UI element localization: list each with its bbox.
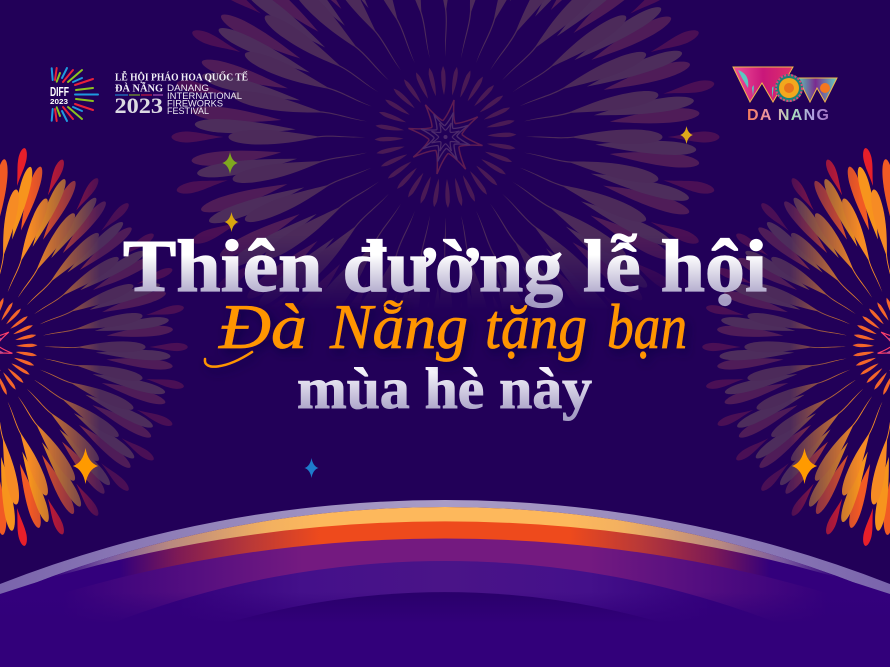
center firework burst [172,0,720,296]
first W [733,67,793,102]
right firework burst [702,148,890,546]
O medallion [775,74,803,102]
festival English name: FESTIVAL [167,106,209,116]
icon: orange sparkle left [73,448,98,484]
orange sun [820,83,830,93]
festival English name: DANANG [167,83,209,93]
festival Vietnamese name: LỄ HỘI PHÁO HOA QUỐC TẾ [115,70,248,84]
icon: yellow sparkle left [224,212,238,232]
title line 2 script [205,291,687,367]
icon: orange sparkle right [792,448,817,484]
W feather detail [738,70,774,98]
colour bar [115,94,163,96]
left firework burst [0,148,188,546]
2023 small: 2023 [50,97,68,106]
icon: yellow sparkle right [680,126,693,144]
DIFF wordmark: DIFF [50,85,69,99]
Da Nang wordmark: DA NANG [747,107,829,124]
festival English name: FIREWORKS [167,98,223,108]
icon: blue sparkle [304,458,318,478]
title line 3: mùa hè này [297,356,592,421]
title line 1: Thiên đường lễ hội [123,226,767,308]
logo: WOW Da Nang [733,67,837,124]
title line 2 script: bạn [607,291,687,362]
title line 2 script: Đà [218,291,307,362]
logo: DIFF 2023 festival [50,68,248,121]
second W [798,78,837,102]
title line 2 script: tặng [485,291,587,362]
icon: green sparkle [222,152,238,174]
year: 2023 [114,93,163,118]
festival English name [167,83,242,116]
icon: DIFF radial rays [52,68,98,121]
title line 2 script: Nẵng [329,291,468,362]
rainbow horizon arcs [0,500,890,667]
festival English name: INTERNATIONAL [167,91,242,101]
Da Nang name: ĐÀ NẴNG [115,82,163,94]
